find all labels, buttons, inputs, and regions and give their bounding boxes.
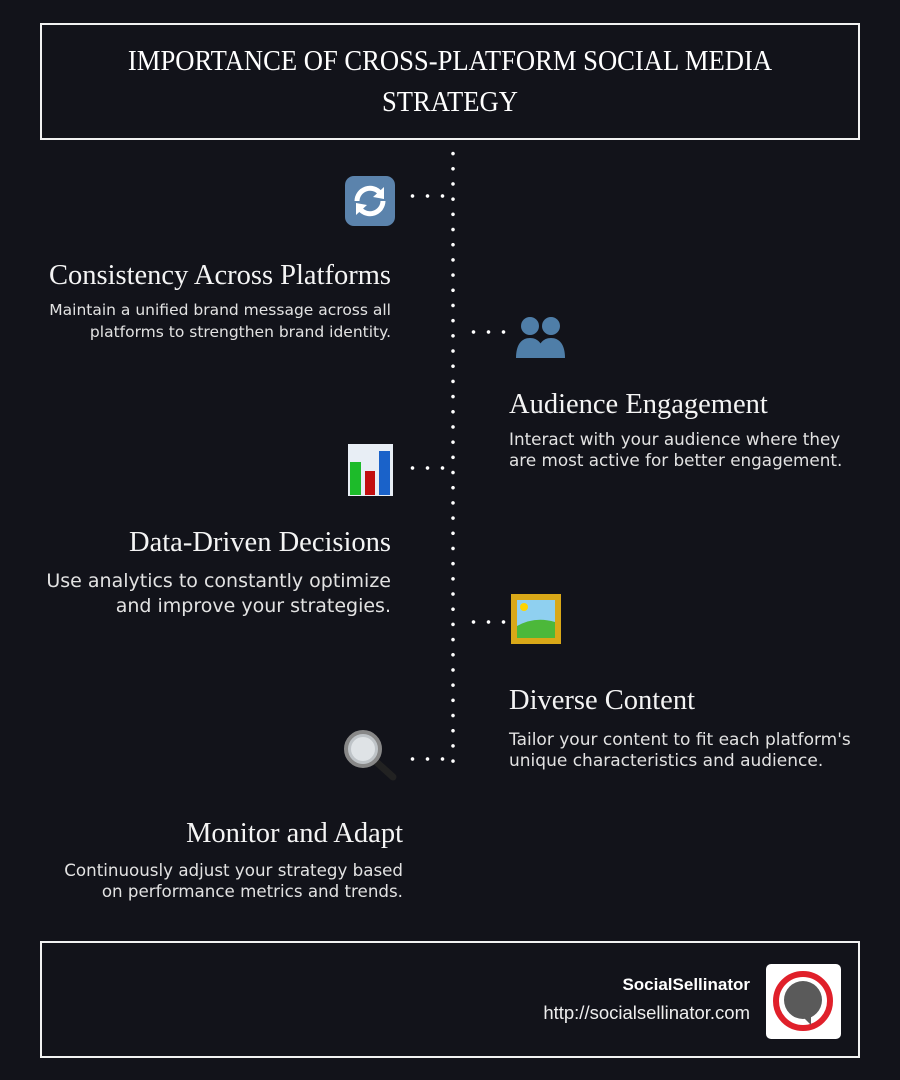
- text: Continuously adjust your strategy based: [64, 860, 403, 880]
- text: Maintain a unified brand message across all: [49, 301, 391, 319]
- text: [49, 301, 391, 341]
- text: platforms to strengthen brand identity.: [90, 323, 391, 341]
- text: on performance metrics and trends.: [102, 881, 403, 901]
- icon: people: [516, 317, 565, 358]
- text: [46, 570, 391, 617]
- text: Tailor your content to fit each platform's: [509, 730, 851, 750]
- text: and improve your strategies.: [116, 595, 391, 617]
- icon: picture: [511, 594, 561, 644]
- url: http://socialsellinator.com: [543, 1002, 750, 1023]
- connector: [405, 757, 455, 761]
- brand name: SocialSellinator: [622, 975, 750, 994]
- item: diverse content: [472, 594, 851, 771]
- heading: Consistency Across Platforms: [49, 260, 391, 291]
- heading: Diverse Content: [509, 685, 695, 716]
- title: STRATEGY: [382, 87, 518, 118]
- title box: [40, 23, 860, 140]
- timeline dotted line: [451, 146, 455, 766]
- title: [128, 46, 772, 118]
- text: [64, 860, 403, 901]
- heading: Data-Driven Decisions: [129, 527, 391, 558]
- item: consistency: [49, 176, 444, 341]
- icon: magnifier: [344, 730, 396, 780]
- item: monitor: [64, 730, 444, 901]
- text: are most active for better engagement.: [509, 450, 842, 470]
- connector: [466, 620, 516, 624]
- icon: sync: [345, 176, 395, 226]
- item: audience: [472, 317, 842, 470]
- connector: [466, 330, 516, 334]
- heading: Audience Engagement: [509, 389, 768, 420]
- text: [508, 730, 851, 771]
- text: unique characteristics and audience.: [509, 751, 823, 771]
- text: Use analytics to constantly optimize: [46, 570, 391, 592]
- footer box: [40, 941, 860, 1058]
- title: IMPORTANCE OF CROSS-PLATFORM SOCIAL MEDIA: [128, 46, 772, 77]
- connector: [405, 194, 455, 198]
- heading: Monitor and Adapt: [186, 818, 403, 849]
- item: data-driven: [46, 444, 444, 617]
- connector: [405, 466, 455, 470]
- text: Interact with your audience where they: [509, 429, 840, 449]
- text: [509, 429, 842, 470]
- icon: bar chart: [348, 444, 393, 496]
- logo: [766, 964, 841, 1039]
